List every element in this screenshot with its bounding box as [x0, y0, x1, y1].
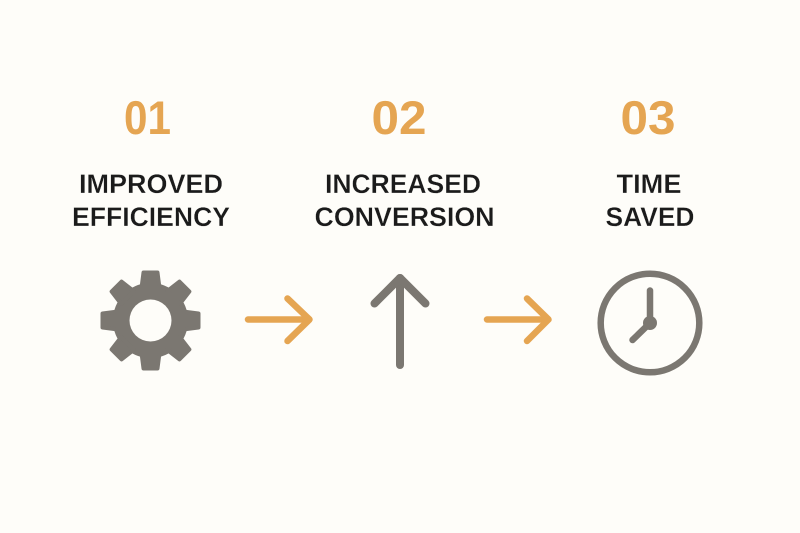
- heading: time saved: TIME: [616, 169, 682, 199]
- number 01: 01: [124, 91, 171, 144]
- heading: improved efficiency: EFFICIENCY: [72, 202, 230, 232]
- step 3: time saved: [601, 91, 699, 372]
- step 2: increased conversion: [314, 91, 494, 365]
- heading: increased conversion: INCREASED: [325, 169, 481, 199]
- icon: gear: [102, 272, 198, 368]
- icon: up arrow: [374, 278, 426, 365]
- number 02: 02: [372, 91, 426, 144]
- heading: time saved: SAVED: [606, 202, 694, 232]
- heading: increased conversion: [314, 169, 494, 232]
- arrow: step 2 to step 3: [487, 298, 548, 341]
- heading: improved efficiency: IMPROVED: [79, 169, 223, 199]
- step 1: improved efficiency: [72, 91, 230, 368]
- arrow: step 1 to step 2: [248, 298, 310, 341]
- icon: clock: [601, 274, 699, 372]
- heading: time saved: [606, 169, 694, 232]
- number 03: 03: [620, 91, 676, 144]
- heading: increased conversion: CONVERSION: [314, 202, 494, 232]
- heading: improved efficiency: [72, 169, 230, 232]
